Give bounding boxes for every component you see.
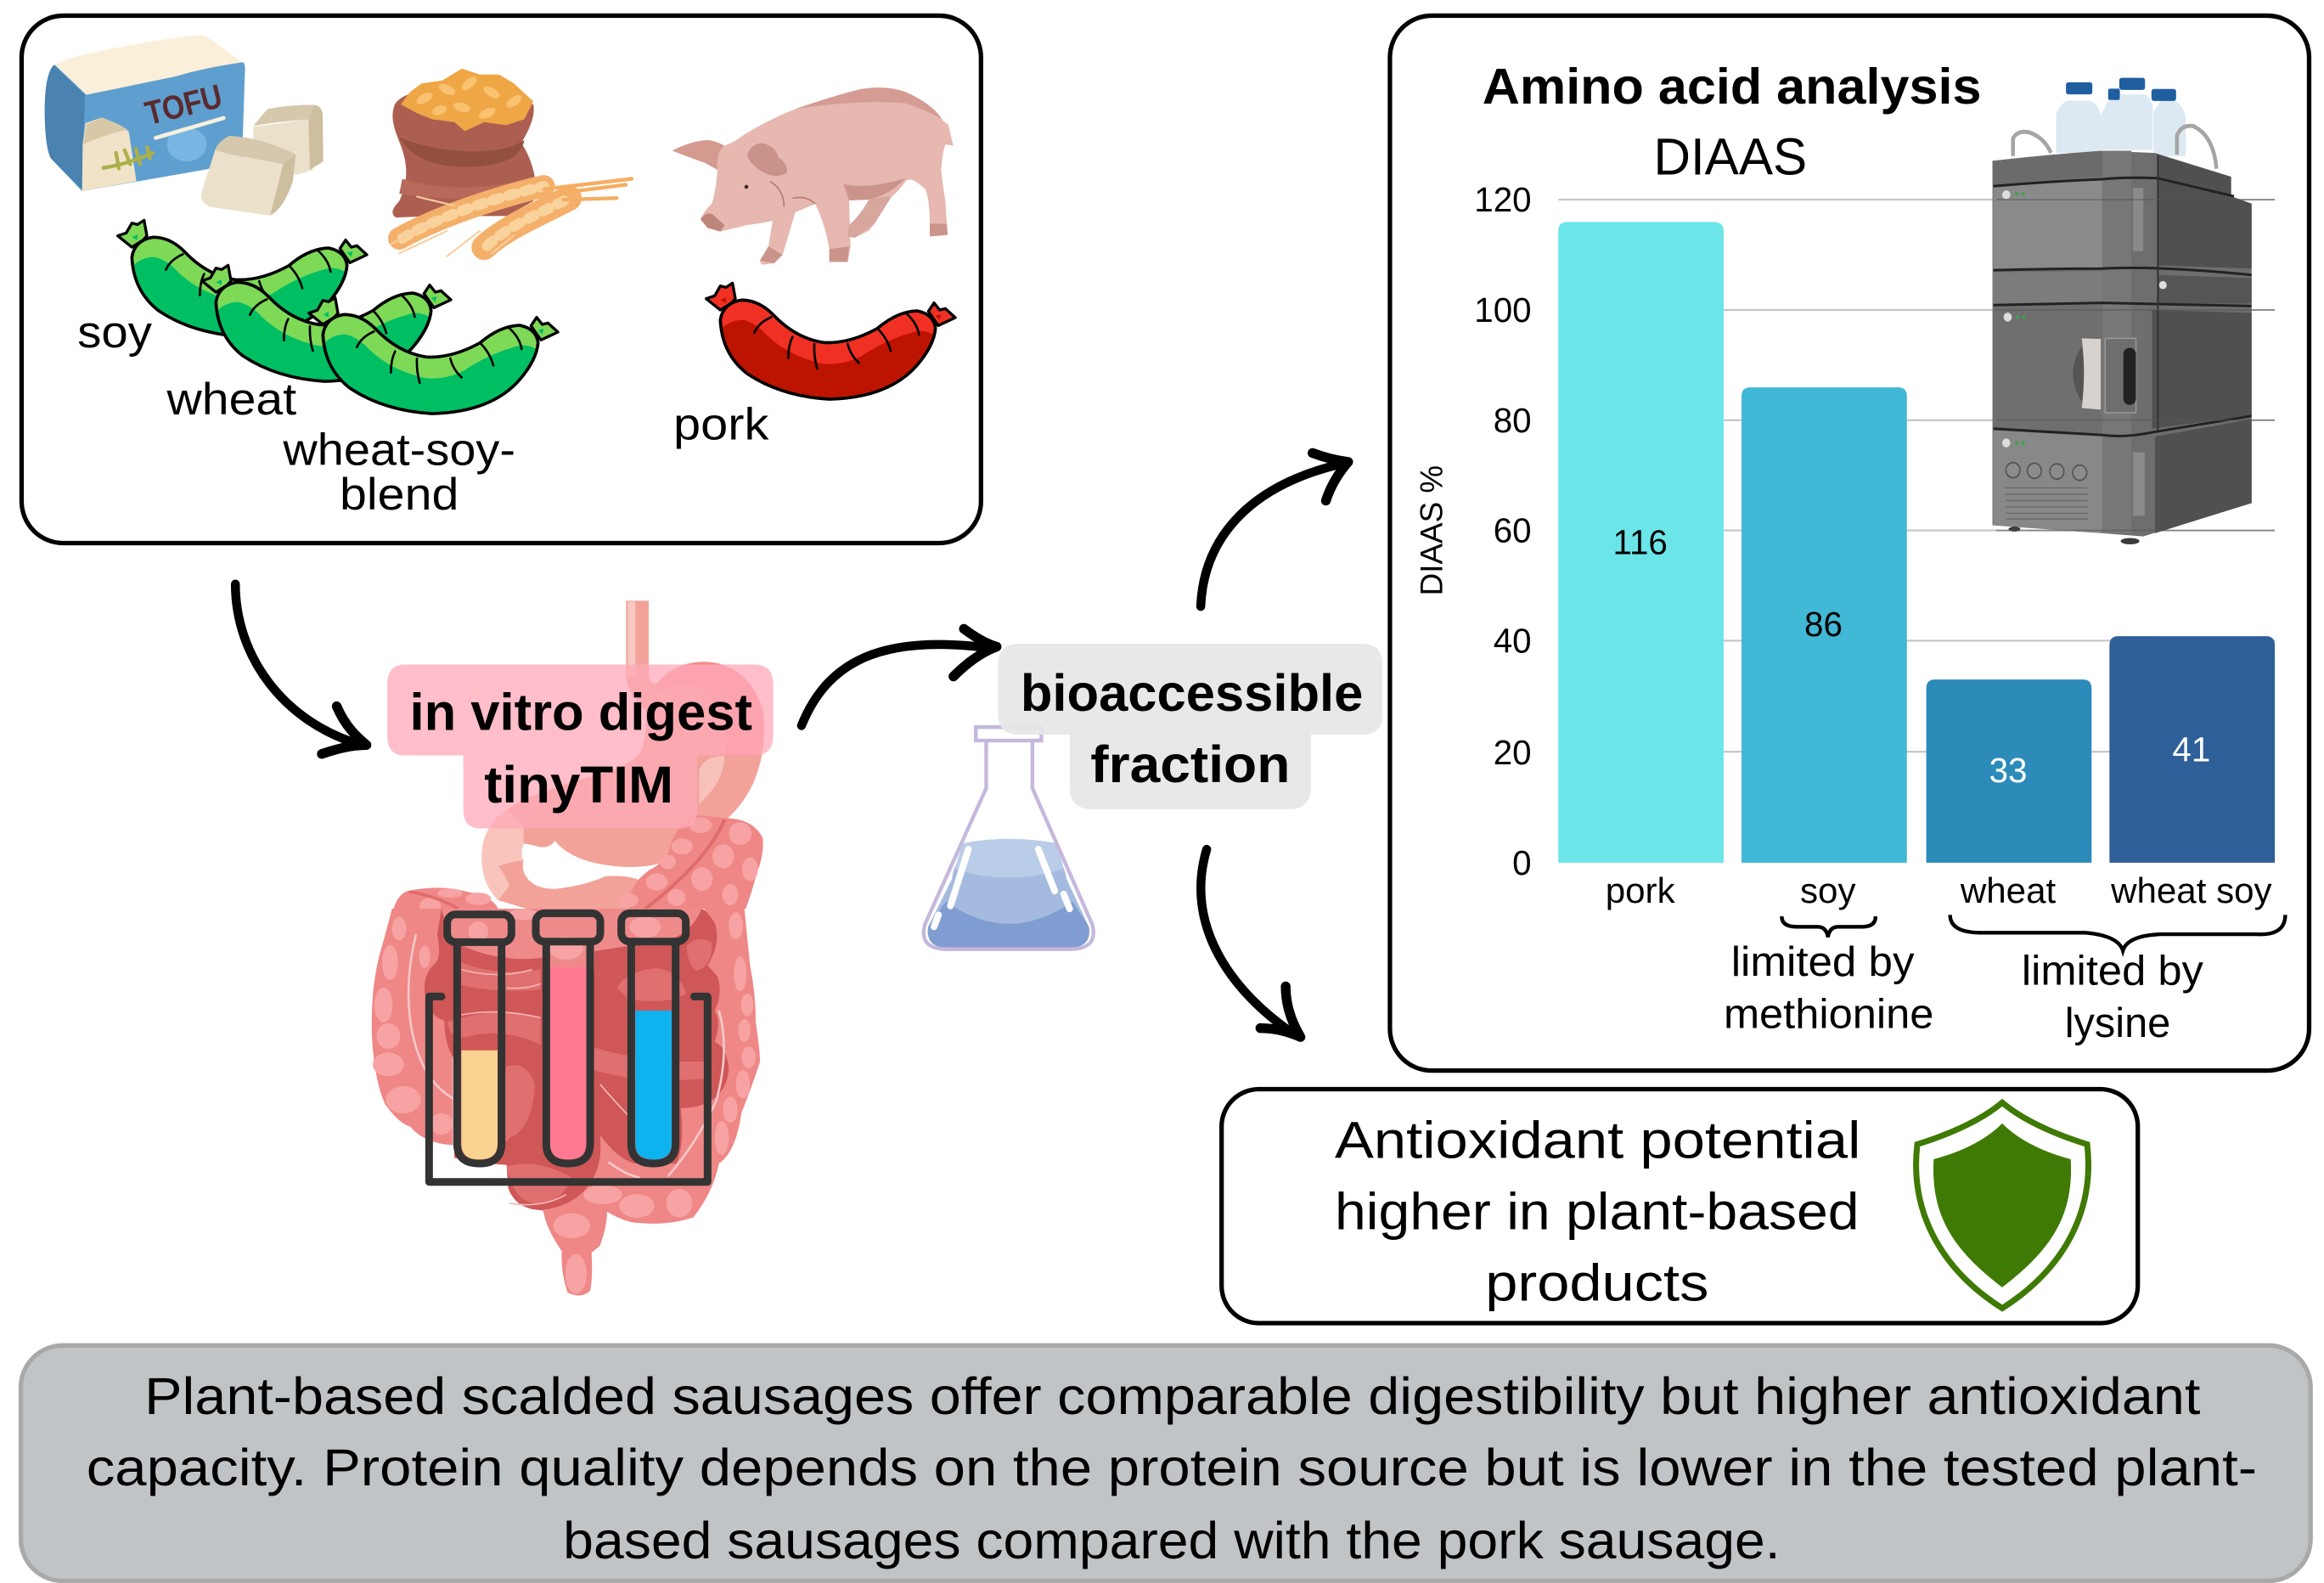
label: in vitro digest tinyTIM [387, 665, 774, 829]
panel: amino acid analysis chart [1390, 15, 2309, 1071]
x-axis category labels: soy [1800, 870, 1856, 910]
y-axis tick labels: 20 [1494, 733, 1532, 772]
icon: plant sausage wheat [202, 265, 451, 381]
text: limited by methionine: methionine [1724, 992, 1933, 1038]
text: conclusion statement: capacity. Protein quality depends on the protein source but is lower in the tested plant- [87, 1439, 2257, 1497]
colon right upper [393, 815, 763, 914]
arrow: digest to bioaccessible fraction [802, 628, 997, 725]
y-axis title: DIAAS % [1414, 465, 1449, 595]
label: bioaccessible fraction [999, 644, 1382, 809]
icon: grain sack with wheat [391, 69, 632, 256]
icon: tofu package and cubes [45, 36, 324, 216]
colon sides and rectum [372, 909, 760, 1296]
text: limited by lysine: lysine [2065, 1000, 2170, 1046]
bar: wheat 33: 33 [1989, 751, 2027, 790]
label: pork: pork [673, 400, 769, 450]
label: bioaccessible fraction: fraction [1090, 735, 1290, 794]
small intestine [408, 909, 729, 1210]
y-axis tick labels: 0 [1512, 843, 1532, 882]
y-axis tick labels: 40 [1494, 621, 1532, 660]
bar: wheat soy 41 [2109, 636, 2275, 863]
text: antioxidant statement: higher in plant-based [1335, 1182, 1860, 1241]
icon: plant sausage blend [309, 297, 558, 414]
x-axis category labels [1606, 870, 2272, 910]
brace: soy [1781, 916, 1876, 938]
text: conclusion statement: based sausages compared with the pork sausage. [563, 1512, 1781, 1570]
y-axis tick labels [1474, 180, 1532, 882]
icon: plant sausage soy [118, 220, 367, 336]
label: wheat-soy-blend [282, 425, 515, 520]
x-axis category labels: wheat [1960, 870, 2057, 910]
text: conclusion statement: Plant-based scalded sausages offer comparable digestibility but higher antioxidant [144, 1367, 2200, 1426]
text: limited by methionine [1724, 939, 1933, 1038]
bar: pork 116: 116 [1613, 523, 1668, 562]
text: antioxidant statement: Antioxidant potential [1335, 1111, 1860, 1169]
label: bioaccessible fraction: bioaccessible [1021, 664, 1363, 723]
arrow: fraction to amino acid analysis [1201, 453, 1348, 606]
label: wheat: wheat [166, 375, 297, 425]
arrow: ingredients to digest [235, 584, 367, 754]
y-axis tick labels: 100 [1474, 290, 1532, 330]
arrow: fraction to antioxidant potential [1201, 849, 1301, 1037]
bar: soy 86: 86 [1804, 605, 1843, 644]
y-axis tick labels: 60 [1494, 511, 1532, 550]
icon: digestive tract [372, 600, 764, 1296]
icon: HPLC instrument [1993, 78, 2252, 544]
icon: pig [672, 87, 954, 265]
icon: green shield [1916, 1102, 2088, 1308]
text: antioxidant statement [1335, 1111, 1860, 1313]
chart gridlines [1558, 200, 2275, 752]
bar: pork 116 [1558, 222, 1724, 863]
panel: antioxidant potential [1222, 1090, 2138, 1323]
label: in vitro digest tinyTIM: tinyTIM [484, 756, 673, 814]
label: in vitro digest tinyTIM: in vitro digest [409, 684, 752, 742]
chart gridlines over instrument [1996, 200, 2275, 531]
y-axis tick labels: 80 [1494, 401, 1532, 440]
text: limited by lysine: limited by [2022, 949, 2203, 994]
label: soy: soy [77, 307, 153, 358]
label: tofu lettering: TOFU [142, 77, 226, 132]
brace: wheat and wheat soy [1950, 915, 2285, 950]
y-axis tick labels: 120 [1474, 180, 1532, 219]
icon: test tubes in rack [429, 913, 707, 1182]
x-axis category labels: pork [1606, 870, 1676, 910]
bar: wheat 33 [1927, 679, 2091, 863]
label: wheat-soy-blend: blend [340, 470, 459, 520]
stomach and esophagus [481, 600, 764, 909]
text: antioxidant statement: products [1485, 1254, 1708, 1313]
text: limited by lysine [2022, 949, 2203, 1046]
subtitle: DIAAS: DIAAS [1653, 127, 1807, 186]
text: limited by methionine: limited by [1731, 939, 1915, 985]
icon: flask [924, 727, 1094, 949]
panel: sausage ingredients [21, 15, 981, 544]
icon: pork sausage [706, 283, 955, 399]
label: wheat-soy-blend: wheat-soy- [282, 425, 515, 475]
bar: soy 86 [1742, 387, 1907, 863]
panel: conclusion [21, 1345, 2310, 1581]
bar: wheat soy 41: 41 [2172, 730, 2210, 769]
x-axis category labels: wheat soy [2110, 870, 2272, 910]
title: amino acid analysis: Amino acid analysis [1483, 58, 1981, 115]
text: conclusion statement [87, 1367, 2257, 1570]
